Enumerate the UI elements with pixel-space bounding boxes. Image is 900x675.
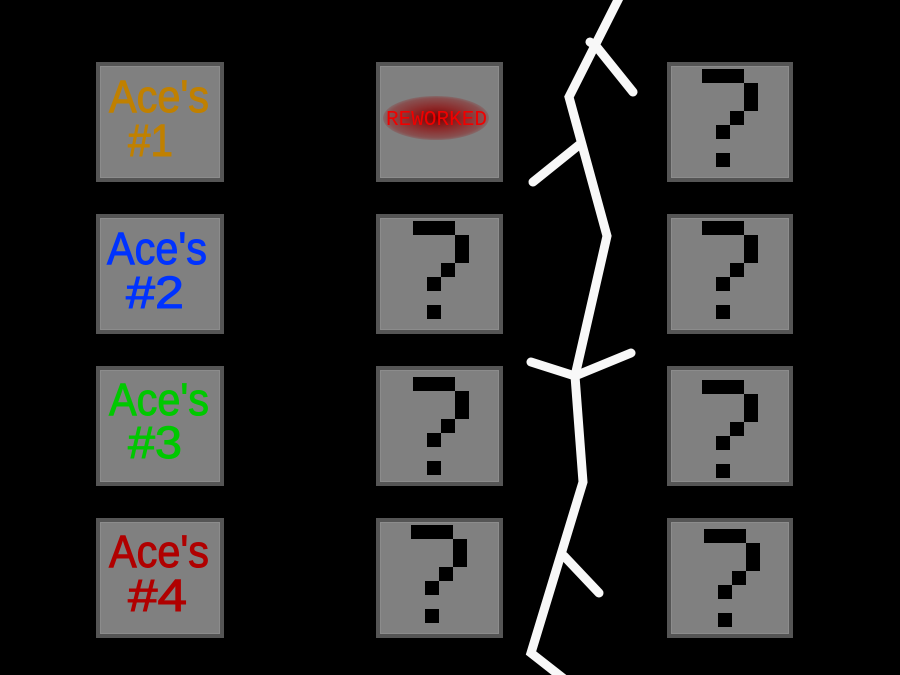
label: Ace's #1: #1 [128, 115, 173, 166]
panel: column 2 row 2 mystery [378, 216, 501, 332]
icon: question mark [702, 221, 758, 319]
label: Ace's #4: #4 [128, 570, 187, 621]
panel: Ace's #2 [98, 216, 222, 332]
panel: Ace's #3 [98, 368, 222, 484]
icon: question mark [413, 377, 469, 475]
label: Ace's #4: Ace's [109, 526, 209, 577]
icon: lightning crack [531, 0, 633, 675]
label: Ace's #4 [109, 526, 209, 621]
panel: column 3 row 3 mystery [669, 368, 791, 484]
label: Ace's #3 [109, 374, 209, 468]
icon: question mark [413, 221, 469, 319]
label: Ace's #3: Ace's [109, 374, 209, 425]
label: REWORKED: REWORKED [386, 109, 487, 132]
panel: column 2 row 3 mystery [378, 368, 501, 484]
panel: column 3 row 4 mystery [669, 520, 791, 636]
panel: Ace's #4 [98, 520, 222, 636]
label: Ace's #3: #3 [128, 417, 182, 468]
icon: question mark [411, 525, 467, 623]
panel: Ace's #1 [98, 64, 222, 180]
label: Ace's #2 [107, 223, 207, 318]
icon: question mark [702, 69, 758, 167]
icon: question mark [702, 380, 758, 478]
panel: column 3 row 1 mystery [669, 64, 791, 180]
label: Ace's #1: Ace's [109, 71, 209, 122]
panel: column 2 row 4 mystery [378, 520, 501, 636]
glow: red ellipse [383, 96, 489, 140]
icon: question mark [704, 529, 760, 627]
label: Ace's #1 [109, 71, 209, 166]
panel: column 3 row 2 mystery [669, 216, 791, 332]
panel: reworked [378, 64, 501, 180]
label: Ace's #2: Ace's [107, 223, 207, 274]
label: Ace's #2: #2 [126, 267, 184, 318]
